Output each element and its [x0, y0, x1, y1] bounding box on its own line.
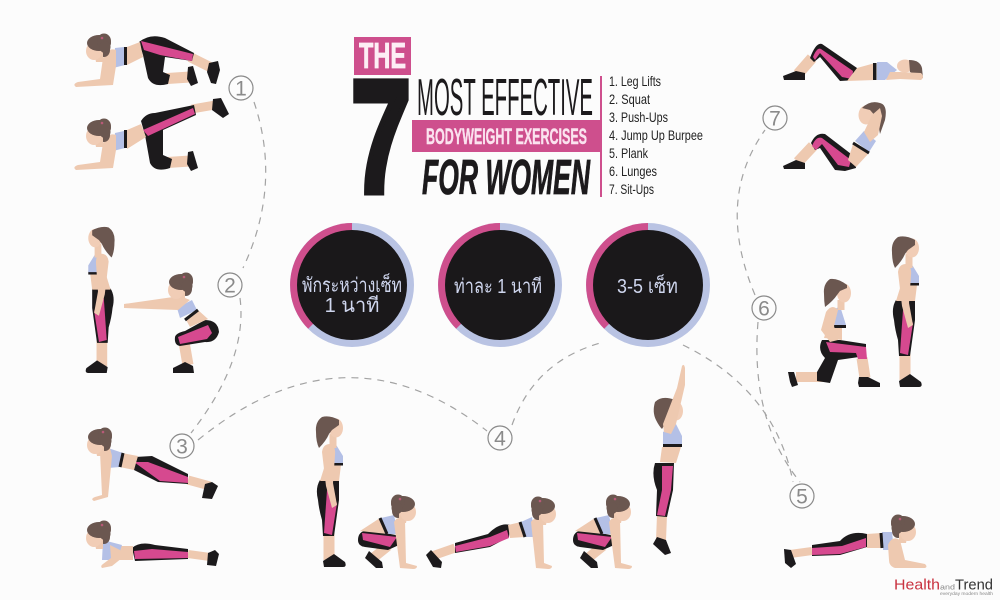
logo: everyday modern health	[940, 591, 994, 596]
badge: sets: 3-5 เซ็ท	[617, 273, 678, 298]
number markers: 5	[796, 486, 808, 508]
exercise list: 2. Squat	[609, 91, 650, 107]
badge: sets	[586, 223, 710, 347]
figure: push-up low	[86, 520, 219, 568]
number markers: 7	[769, 108, 781, 130]
title	[351, 35, 600, 226]
figure: burpee crouch	[358, 494, 417, 569]
exercise list	[600, 73, 703, 197]
exercise list: 1. Leg Lifts	[609, 73, 661, 89]
figure: lunge low	[788, 279, 880, 387]
number markers: 3	[176, 436, 188, 458]
title: FOR WOMEN	[422, 151, 591, 205]
figure: burpee crouch second	[573, 494, 632, 569]
logo: Health	[894, 576, 940, 594]
exercise list: 3. Push-Ups	[609, 109, 668, 125]
title: BODYWEIGHT EXERCISES	[426, 124, 587, 149]
logo: and	[940, 584, 955, 592]
figure: sit-up lying	[783, 44, 923, 81]
exercise list: 5. Plank	[609, 145, 649, 161]
badge: rest between sets: 1 นาที	[325, 295, 379, 317]
figure: plank	[784, 514, 926, 568]
badge: per exercise	[438, 223, 562, 347]
text: MOST EFFECTIVE	[417, 69, 593, 127]
number markers	[170, 76, 814, 508]
figure: push-up high	[87, 428, 218, 501]
title: THE	[359, 35, 406, 76]
figure: squat	[124, 272, 219, 373]
logo	[894, 576, 994, 596]
badge: per exercise: ท่าละ 1 นาที	[454, 276, 542, 298]
figure: standing, squat start	[86, 227, 115, 373]
number markers: 2	[224, 274, 236, 298]
logo: Trend	[955, 576, 993, 594]
figure: leg lift, leg extended	[74, 98, 229, 171]
figure: burpee standing	[316, 416, 346, 567]
dashed connectors	[191, 102, 800, 482]
title: 7	[351, 47, 411, 226]
figure: burpee plank	[426, 496, 556, 569]
badge: rest between sets	[290, 223, 414, 347]
exercise list: 4. Jump Up Burpee	[609, 127, 703, 143]
badge: rest between sets: พักระหว่างเซ็ท	[302, 272, 402, 297]
figure: lunge standing	[892, 236, 922, 387]
figure: burpee jump	[653, 365, 685, 555]
figure: sit-up raised	[783, 102, 886, 171]
exercise list: 6. Lunges	[609, 163, 657, 179]
number markers: 4	[494, 428, 506, 450]
number markers: 1	[235, 78, 247, 100]
number markers: 6	[758, 298, 770, 320]
exercise list: 7. Sit-Ups	[609, 181, 654, 197]
figure: leg lift, knee raised	[74, 34, 220, 87]
